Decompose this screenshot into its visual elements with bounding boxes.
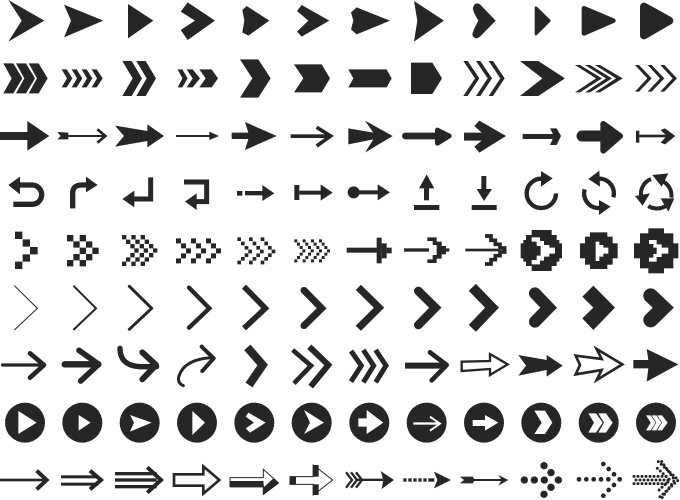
icon: small dot arrow [577, 462, 622, 498]
icon: open head arrow [291, 127, 331, 146]
icon: tailed thin arrow [460, 475, 508, 486]
icon: circle double chevron [579, 403, 619, 443]
icon: recycle arrows [635, 173, 674, 212]
icon: pixel circle chevron [521, 230, 562, 271]
icon: brush swoosh arrow [178, 347, 214, 386]
icon: notched arrowhead large [8, 0, 44, 42]
icon: dart arrow [232, 122, 277, 150]
icon: pixel circle play [580, 232, 618, 269]
icon: light chevron [129, 286, 152, 329]
icon: brush triple chevron [351, 350, 386, 382]
icon: fat round chevron [535, 293, 549, 322]
icon: long tag chevron [348, 69, 392, 87]
row 6: line chevrons of growing weight [14, 286, 663, 330]
icon: shadow outline arrow [230, 469, 279, 495]
icon: double head arrow [115, 124, 164, 147]
icon: circle line arrow [407, 403, 447, 443]
icon: upload arrow [414, 174, 439, 210]
icon: circle chevron [521, 403, 561, 443]
icon: dot arrow [348, 184, 390, 200]
icon: triple chevron [3, 63, 48, 93]
row 2: chevrons [3, 59, 677, 98]
icon: rounded heart head [472, 3, 496, 38]
icon: bold round chevron [304, 290, 322, 326]
icon: heavy round chevron [418, 291, 435, 325]
icon: pixel checker arrow [122, 235, 157, 266]
row 1: arrowheads [8, 0, 669, 42]
icon: tag chevron [294, 64, 330, 92]
icon: half outline arrow [290, 465, 333, 495]
row 5: pixel arrows [15, 228, 678, 273]
row 8: circle badges [5, 403, 676, 443]
icon: refresh arrow [527, 171, 556, 208]
icon: pixel chevron large [15, 232, 38, 269]
icon: circle small arrow [464, 403, 504, 443]
icon: triple line chevron [635, 65, 677, 92]
icon: pentagon tag [411, 63, 442, 94]
icon: thin arrow [176, 132, 219, 140]
icon: flat triple line chevron [575, 65, 623, 92]
icon: loop back arrow [184, 182, 207, 210]
icon: turn right arrow [73, 177, 98, 208]
icon: pixel thin head arrow [465, 236, 505, 264]
icon: double line arrow [61, 471, 101, 489]
icon: brush arrow thin [3, 353, 44, 378]
icon: triple line arrow [115, 467, 161, 493]
icon: pixel badge chevron [634, 228, 678, 273]
icon: circle notched head [120, 403, 160, 443]
icon: brush chevron [247, 347, 263, 385]
icon: brush outline dart [576, 349, 622, 380]
icon: circle narrow play [177, 403, 217, 443]
icon: brush solid arrow [633, 349, 678, 382]
icon: rounded triangle [584, 8, 613, 33]
icon: u-turn arrow [8, 177, 42, 204]
icon: long concave head [351, 7, 390, 34]
icon: tall curved head [414, 1, 444, 42]
icon: circle triple chevron [636, 403, 676, 443]
icon: extra heavy chevron [472, 287, 492, 328]
icon: chevron head [297, 5, 329, 37]
row 7: hand drawn arrows [3, 347, 678, 387]
icon: growing chevrons [178, 69, 218, 87]
icon: heavy chevron [358, 287, 379, 328]
icon: brush arrow bold [65, 350, 99, 381]
icon: four small chevrons [62, 69, 103, 87]
icon: pixel double chevron [67, 235, 99, 266]
icon: brush long arrow [405, 352, 447, 380]
icon: circle play small [62, 403, 102, 443]
icon: arrow with chevron head [523, 128, 561, 145]
icon: dashed arrow [403, 472, 451, 488]
icon: block chevron [582, 286, 615, 330]
icon: circle bold chevron [234, 403, 274, 443]
icon: brush barbed arrow [518, 355, 563, 377]
icon: medium chevron [189, 288, 209, 328]
icon: wide chevron [240, 59, 271, 98]
icon: small rounded triangle [536, 8, 549, 34]
icon: solid arrow [0, 121, 49, 151]
icon: heart chevron [651, 296, 663, 320]
icon: double chevron [122, 61, 156, 96]
icon: outline arrow [174, 466, 219, 494]
icon: big rounded triangle [644, 7, 669, 35]
icon: circle solid arrow [349, 403, 389, 443]
icon: bold chevron head [181, 2, 215, 40]
icon: fletched thin arrow [57, 129, 105, 143]
icon: notched arrowhead [64, 5, 103, 37]
icon: download arrow [472, 176, 497, 210]
icon: feather arrow [346, 471, 394, 489]
icon: long line arrow [0, 471, 47, 489]
icon: bar arrow [636, 128, 675, 144]
icon: thin chevron [73, 286, 96, 330]
icon: sync arrows [584, 171, 614, 215]
icon: rounded arrow [405, 130, 449, 143]
icon: hairline chevron [14, 286, 37, 330]
icon: bold arrow [464, 121, 506, 153]
icon: concave head [242, 6, 269, 36]
icon: halftone dot arrow [634, 462, 678, 498]
icon: barbed arrow [348, 121, 393, 153]
icon: brush curved arrow [120, 348, 157, 379]
icon: semi bold chevron [244, 287, 265, 328]
icon: pixel fine triple chevron [237, 237, 275, 264]
icon: brush outline arrow [462, 354, 508, 375]
row 9: line, outline and dotted arrows [0, 462, 678, 498]
icon: circle sharp head [292, 403, 332, 443]
icon: pixel bold head arrow [404, 237, 449, 263]
row 3: straight arrows [0, 121, 675, 153]
icon: fat rounded arrow [582, 124, 620, 151]
icon: wide flat chevron [520, 61, 565, 96]
icon: pixel triple chevron [176, 238, 221, 263]
row 4: turn and action arrows [8, 171, 674, 215]
icon: return arrow [122, 177, 151, 207]
icon: circle play large [5, 403, 45, 443]
icon: thin triple chevron [463, 61, 505, 96]
icon: triangle [128, 4, 153, 38]
icon: pixel solid arrow [347, 238, 392, 263]
icon: pixel fine quad chevron [294, 239, 330, 262]
icon: large dot arrow [521, 462, 562, 498]
icon: brush double chevron [293, 347, 328, 387]
icon: dash arrow [237, 185, 274, 201]
icon: bar end arrow [294, 184, 333, 201]
